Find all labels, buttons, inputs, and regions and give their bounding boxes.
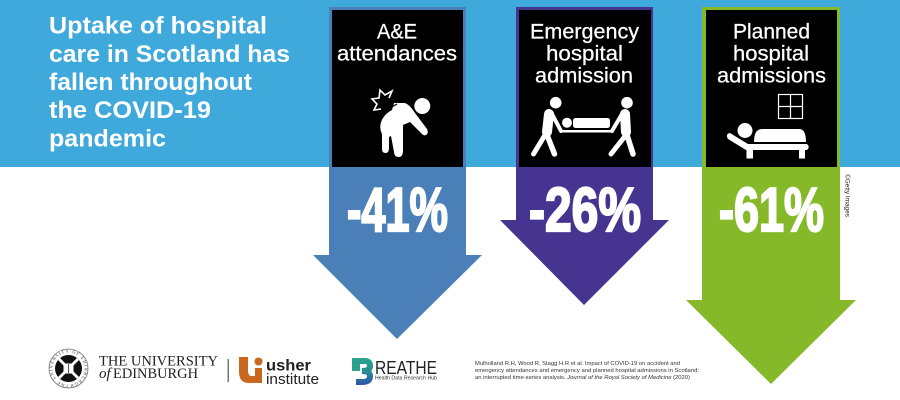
title (49, 12, 290, 152)
heading: A&E (337, 20, 457, 66)
BREATHE wordmark: REATHE (375, 357, 437, 378)
title: care in Scotland has (49, 41, 290, 68)
heading: Emergency: Emergency (530, 20, 639, 44)
icon: patient in bed (727, 123, 809, 158)
citation: Mulholland R.H, Wood R, Stagg H.R et al. Impact of COVID-19 on accident and (475, 361, 680, 367)
panel: A&E attendances (313, 7, 482, 339)
panel: Planned hospital admissions (686, 7, 856, 384)
tagline: Health Data Research Hub (375, 376, 437, 382)
usher mark (239, 357, 262, 383)
citation: an interrupted time-series analysis. Journal of the Royal Society of Medicine (2020) (475, 375, 690, 381)
value: -41%: -41% (347, 176, 448, 245)
wordmark: EDINBURGH (113, 366, 198, 382)
heading: Planned: Planned (733, 20, 810, 44)
B mark (352, 358, 370, 382)
citation (475, 361, 699, 381)
heading: A&E: attendances (337, 42, 457, 66)
usher wordmark: usher (266, 358, 311, 374)
photo credit: ©Getty Images (844, 174, 852, 217)
logo: University of Edinburgh (48, 348, 218, 388)
black box: Planned (706, 10, 837, 167)
wordmark: THE UNIVERSITY (99, 354, 218, 370)
title: Uptake of hospital (49, 12, 267, 40)
heading: Emergency: hospital (546, 42, 623, 66)
arrow: A&E (313, 7, 482, 339)
panel: Emergency hospital admission (500, 7, 669, 305)
arrow: Emergency (500, 7, 669, 305)
heading: Emergency (530, 20, 639, 88)
black box: Emergency (519, 10, 651, 167)
icon: person with back pain (372, 90, 430, 157)
wordmark (99, 354, 218, 382)
heading: A&E: A&E (377, 20, 417, 44)
icon: window (778, 94, 802, 118)
citation: emergency attendances and emergency and planned hospital admissions in Scotland: (475, 368, 699, 374)
value: -61%: -61% (719, 176, 824, 245)
usher wordmark (266, 358, 319, 388)
heading: Emergency: admission (535, 64, 633, 88)
heading: Planned (717, 20, 826, 88)
value: -26%: -26% (529, 176, 641, 245)
divider (228, 359, 229, 382)
title: the COVID-19 (49, 97, 211, 124)
crest: THE UNIVERSITY OF EDINBURGH (50, 350, 88, 388)
logo: BREATHE (352, 357, 437, 382)
black box: A&E (332, 10, 463, 167)
logo: Usher Institute (239, 357, 319, 388)
icon: stretcher carriers (534, 97, 633, 154)
usher wordmark: institute (266, 371, 319, 388)
wordmark: of (99, 366, 112, 382)
arrow: Planned (686, 7, 856, 384)
title: pandemic (49, 126, 166, 152)
title: fallen throughout (49, 69, 252, 96)
heading: Planned: admissions (717, 64, 826, 88)
blue header band (0, 0, 900, 167)
heading: Planned: hospital (733, 42, 809, 66)
